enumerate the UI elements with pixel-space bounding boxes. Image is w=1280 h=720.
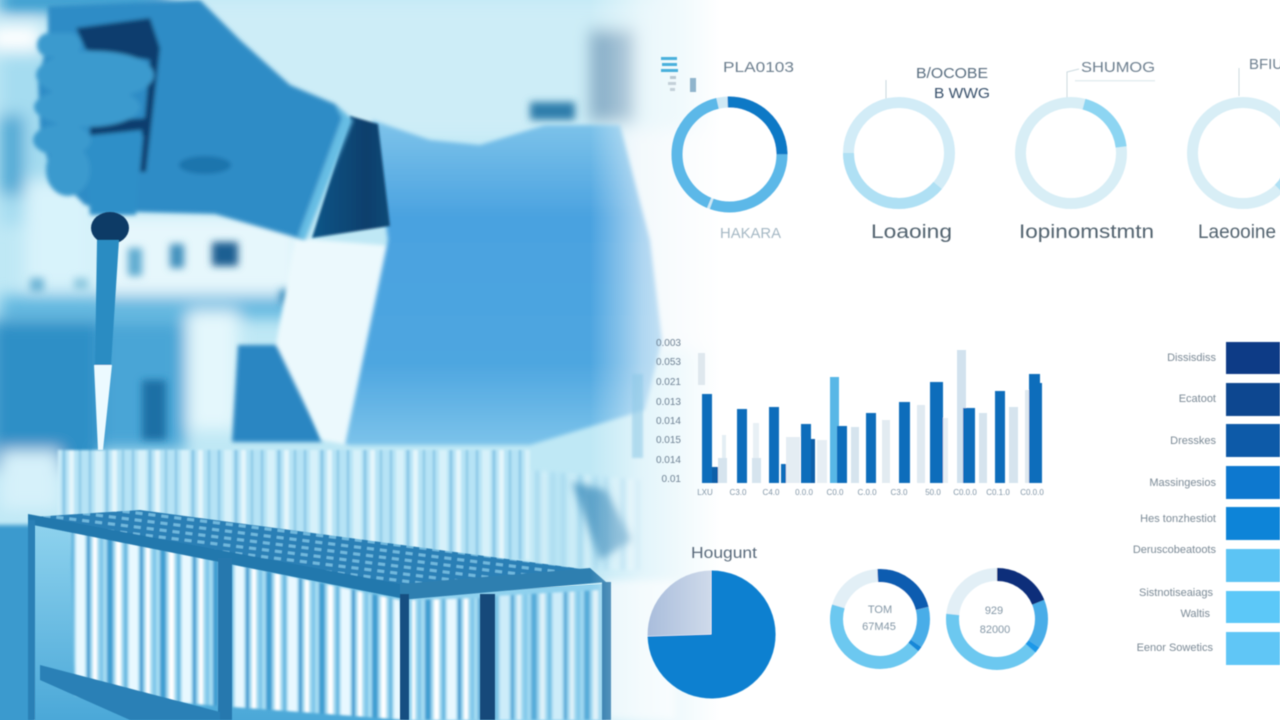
donut B centre text: 929 bbox=[985, 605, 1003, 617]
rack tubes front bbox=[70, 528, 405, 720]
label: donut 1 bottom: HAKARA bbox=[720, 225, 781, 242]
label: donut 1 top: PLA0103 bbox=[723, 59, 794, 76]
x axis labels: C.0.0 bbox=[857, 488, 877, 497]
swatch labels: Dissisdiss bbox=[1167, 352, 1216, 364]
donut 2: B WWG bbox=[934, 85, 990, 102]
y axis labels: 0.014 bbox=[656, 455, 681, 466]
y axis labels bbox=[656, 338, 681, 485]
y axis labels: 0.015 bbox=[656, 435, 681, 446]
bottom background bbox=[0, 525, 35, 720]
gloved hand bbox=[33, 0, 353, 240]
y axis labels: 0.01 bbox=[662, 474, 681, 485]
sleeve bbox=[345, 120, 662, 445]
donut A bbox=[834, 573, 926, 665]
swatch labels: Massingesios bbox=[1149, 477, 1216, 489]
swatch labels bbox=[1133, 352, 1216, 654]
x axis labels: C0.0.0 bbox=[1020, 488, 1044, 497]
donut 1 bbox=[675, 59, 794, 242]
bar chart bbox=[656, 338, 1044, 497]
label: donut 4 bottom: Laeooine bbox=[1198, 222, 1276, 243]
donut A centre text: TOM bbox=[868, 604, 892, 616]
pipette collar, shaft and tip bbox=[91, 212, 129, 450]
donut B: 82000 bbox=[980, 624, 1010, 636]
label: donut 3 bottom: Iopinomstmtn bbox=[1019, 222, 1154, 243]
x axis labels: C0.0 bbox=[827, 488, 844, 497]
donut 3 bbox=[1019, 59, 1155, 243]
rack frame bbox=[28, 510, 611, 720]
donut B bbox=[952, 574, 1042, 664]
swatch labels: Waltis bbox=[1180, 608, 1210, 620]
x axis labels: C3.0 bbox=[891, 488, 908, 497]
swatch labels: Deruscobeatoots bbox=[1133, 544, 1216, 556]
x axis labels: LXU bbox=[697, 488, 713, 497]
x axis labels bbox=[697, 488, 1044, 497]
light blue bar bbox=[830, 377, 839, 483]
label: donut 3 top: SHUMOG bbox=[1081, 59, 1155, 76]
lab coat white panel bbox=[276, 238, 392, 445]
y axis labels: 0.053 bbox=[656, 357, 681, 368]
swatch labels: Dresskes bbox=[1170, 435, 1216, 447]
swatches bbox=[1226, 342, 1280, 374]
fade to white bbox=[590, 0, 720, 720]
x axis labels: 0.0.0 bbox=[795, 488, 813, 497]
pie chart bbox=[648, 545, 776, 698]
test tubes behind rack bbox=[58, 450, 530, 560]
swatch labels: Hes tonzhestiot bbox=[1140, 513, 1216, 525]
photo: laboratory background with pipette and test tube rack bbox=[0, 0, 720, 720]
legend swatches with labels bbox=[1133, 342, 1280, 665]
x axis labels: C3.0 bbox=[730, 488, 747, 497]
x axis labels: C0.0.0 bbox=[953, 488, 977, 497]
pie title: Hougunt bbox=[691, 545, 758, 562]
swatch labels: Sistnotiseaiags bbox=[1139, 587, 1213, 599]
right white panel bbox=[720, 0, 1280, 720]
donut 2 bbox=[848, 65, 990, 243]
wrist bbox=[312, 116, 390, 238]
background lab equipment spots bbox=[30, 102, 575, 440]
donut A: 67M45 bbox=[862, 621, 896, 633]
dark blue bars bbox=[702, 374, 1042, 483]
vertical axis title bbox=[632, 374, 643, 458]
y axis labels: 0.014 bbox=[656, 416, 681, 427]
donut 4 bbox=[1192, 56, 1280, 243]
y axis labels: 0.013 bbox=[656, 397, 681, 408]
swatch labels: Eenor Sowetics bbox=[1137, 642, 1213, 654]
small decorative key top left bbox=[661, 57, 696, 92]
x axis labels: 50.0 bbox=[925, 488, 941, 497]
pale bars bbox=[698, 350, 1029, 483]
label: donut 2 top: B/OCOBE bbox=[916, 65, 988, 82]
x axis labels: C0.1.0 bbox=[986, 488, 1010, 497]
label: donut 2 bottom: Loaoing bbox=[871, 222, 952, 243]
y axis labels: 0.003 bbox=[656, 338, 681, 349]
x axis labels: C4.0 bbox=[763, 488, 780, 497]
y axis labels: 0.021 bbox=[656, 377, 681, 388]
dark triangle behind coat bbox=[232, 345, 322, 442]
swatch labels: Ecatoot bbox=[1179, 393, 1216, 405]
